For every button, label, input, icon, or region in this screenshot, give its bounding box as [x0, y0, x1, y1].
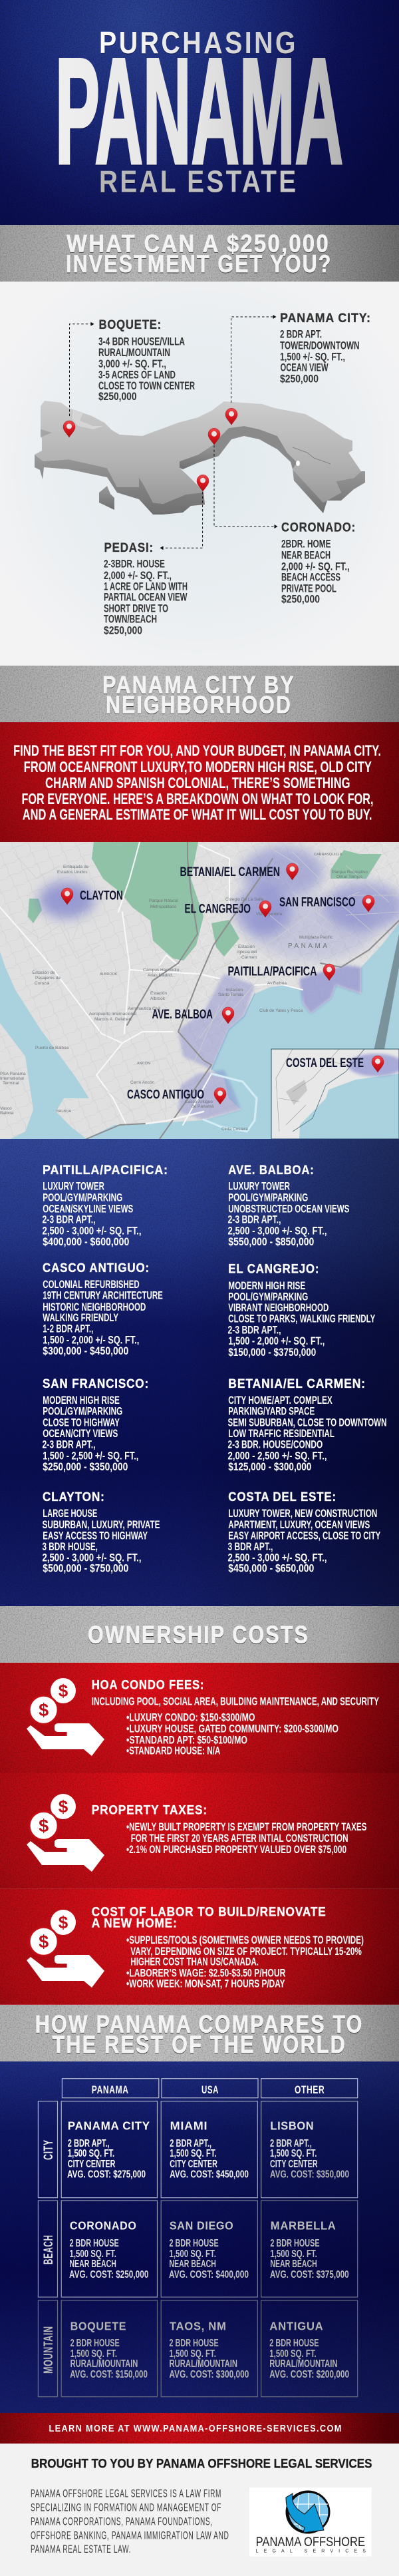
- row label: Beach: BEACH: [41, 2235, 56, 2264]
- place names: de Panamá: [192, 1104, 214, 1109]
- panel: neighborhood details: [0, 1139, 399, 1606]
- text block: Costa del Este: [227, 1490, 381, 1575]
- heading: SAN FRANCISCO:: [43, 1377, 149, 1391]
- section heading: what can a $250,000 investment get you: [0, 225, 399, 282]
- cell: San Diego: 1,500 SQ. FT.: [169, 2249, 216, 2260]
- details: COLONIAL REFURBISHED: [43, 1278, 140, 1291]
- section heading: what can a $250,000 investment get you: INVESTMENT GET YOU?: [66, 250, 332, 278]
- section heading: ownership costs: [0, 1606, 399, 1663]
- icon: hand with coins: $: [59, 1681, 68, 1701]
- column header: USA: [162, 2079, 258, 2098]
- place names: Arias Madrid...: [148, 973, 176, 978]
- icon: hand with coins: $: [59, 1912, 68, 1932]
- cell: Panama City: 1,500 SQ. FT.: [68, 2148, 114, 2159]
- details: Boquete: 3-4 BDR HOUSE/VILLA: [98, 335, 185, 347]
- label: Casco Antiguo: CASCO ANTIGUO: [127, 1088, 204, 1102]
- cell: Taos, NM: 1,500 SQ. FT.: [169, 2348, 216, 2360]
- details: POOL/GYM/PARKING: [43, 1191, 122, 1204]
- details: Coronado: $250,000: [281, 592, 320, 605]
- panel: about: [0, 2444, 399, 2576]
- details: $400,000 - $600,000: [43, 1235, 129, 1248]
- place names: Estación: [238, 945, 255, 949]
- icon: Panama City pin: [225, 408, 237, 425]
- section heading: what can a $250,000 investment get you: WHAT CAN A $250,000: [66, 229, 330, 257]
- text block: Casco Antiguo: [43, 1261, 163, 1357]
- place names: Estación: [226, 988, 243, 992]
- details: Boquete: RURAL/MOUNTAIN: [98, 346, 170, 359]
- place names: Estación de: [33, 970, 55, 975]
- panel: HOA condo fees: [0, 1663, 399, 1773]
- place names: PANAMA: [288, 943, 330, 950]
- details: LUXURY TOWER: [228, 1180, 290, 1193]
- details: LUXURY TOWER: [43, 1180, 104, 1193]
- place names: Carmen: [241, 955, 257, 960]
- details: OCEAN/SKYLINE VIEWS: [43, 1203, 133, 1215]
- details: 1,500 - 2,000 +/- SQ. FT.,: [228, 1335, 325, 1347]
- text block: HOA details: •LUXURY CONDO: $150-$300/MO: [126, 1711, 255, 1724]
- cell: Miami: AVG. COST: $450,000: [170, 2169, 249, 2181]
- place names: Iglesia del: [237, 950, 257, 955]
- heading: CLAYTON:: [43, 1490, 105, 1504]
- heading: property taxes: PROPERTY TAXES:: [92, 1803, 207, 1818]
- column header: Panama: [62, 2079, 159, 2098]
- text block: labor details: •LABORER’S WAGE: $2.50-$3.50 P/HOUR: [126, 1966, 285, 1979]
- place names: ALBROOK: [100, 972, 118, 976]
- arrow: Boquete: [69, 322, 94, 416]
- details: 2,000 - 2,500 +/- SQ. FT.,: [227, 1449, 327, 1462]
- details: LOW TRAFFIC RESIDENTIAL: [228, 1427, 334, 1440]
- details: 2-3 BDR APT.,: [227, 1213, 281, 1226]
- details: Panama City: [280, 328, 359, 385]
- details: [43, 1507, 160, 1575]
- place names: Aeropuerto Internacional: [89, 1012, 137, 1016]
- cell: Marbella: [261, 2201, 358, 2297]
- cell: Coronado: [61, 2201, 157, 2297]
- details: Coronado: 2BDR. HOME: [281, 537, 331, 550]
- place names: Multiplaza Pacific: [299, 935, 333, 940]
- row label: Beach: [38, 2201, 57, 2297]
- details: Panama City: TOWER/DOWNTOWN: [280, 339, 359, 351]
- place names: CARRASQUILLA: [314, 853, 342, 857]
- details: Boquete: $250,000: [98, 390, 137, 403]
- cell: Taos, NM: [161, 2300, 257, 2397]
- cell: Antigua: ANTIGUA: [269, 2320, 323, 2333]
- heading: COSTA DEL ESTE:: [228, 1490, 336, 1504]
- text block: Paitilla/Pacifica: [43, 1163, 168, 1248]
- call to action: learn more: [0, 2413, 399, 2444]
- cell: Panama City: 2 BDR APT.,: [68, 2138, 110, 2149]
- panel: cost of labor: [0, 1889, 399, 2005]
- details: CLOSE TO HIGHWAY: [43, 1416, 120, 1429]
- cell: Boquete: 1,500 SQ. FT.: [70, 2348, 117, 2360]
- section heading: Panama City by neighborhood: PANAMA CITY BY: [102, 671, 295, 699]
- details: LARGE HOUSE: [43, 1507, 97, 1520]
- place names: Parque Recreativo: [332, 870, 368, 875]
- cell: Marbella: MARBELLA: [271, 2219, 336, 2233]
- title: Purchasing: PURCHASING: [99, 25, 298, 60]
- cell: Coronado: CORONADO: [70, 2219, 137, 2233]
- text block: Betania/El Carmen: [227, 1377, 387, 1473]
- row label: City: CITY: [41, 2139, 56, 2160]
- label: Clayton: CLAYTON: [80, 889, 123, 903]
- place names: Corozal: [35, 981, 50, 986]
- details: 19TH CENTURY ARCHITECTURE: [43, 1289, 163, 1302]
- roads: [0, 842, 399, 1139]
- cell: Antigua: RURAL/MOUNTAIN: [269, 2358, 338, 2370]
- place names: BALBOA: [57, 1110, 71, 1114]
- details: Coronado: [281, 537, 350, 605]
- details: Pedasi: 2,000 +/- SQ. FT.,: [104, 569, 172, 582]
- logo wordmark: PANAMA OFFSHORE: [256, 2535, 365, 2549]
- icon: hand with coins: [27, 1678, 104, 1756]
- text block: labor details: HIGHER COST THAN US/CANADA.: [130, 1956, 259, 1968]
- details: 2-3 BDR APT.,: [227, 1323, 281, 1336]
- text block: intro: [13, 742, 381, 823]
- text block: Coronado: [281, 521, 356, 605]
- cell: Lisbon: AVG. COST: $350,000: [270, 2169, 349, 2181]
- call to action: learn more: LEARN MORE AT WWW.PANAMA-OFFSHORE-SERVICES.COM: [49, 2424, 342, 2434]
- icon: hand with coins: [27, 1910, 104, 1988]
- logo: Panama Offshore Legal Services: [249, 2487, 372, 2557]
- details: HISTORIC NEIGHBORHOOD: [43, 1301, 146, 1313]
- city street grid: [186, 842, 399, 1070]
- arrow: Panama City: [231, 315, 277, 403]
- cell: Lisbon: CITY CENTER: [270, 2159, 318, 2170]
- icon: Boquete pin: [63, 421, 75, 437]
- place names: Vasco: [0, 1106, 12, 1111]
- label: El Cangrejo: EL CANGREJO: [185, 903, 251, 917]
- details: Pedasi: SHORT DRIVE TO: [104, 602, 168, 614]
- text block: San Francisco: [43, 1377, 149, 1473]
- place names: Club de Yates y Pesca: [259, 1008, 303, 1013]
- text block: about the firm: PANAMA CORPORATIONS, PANAMA FOUNDATIONS,: [31, 2515, 213, 2528]
- details: EASY ACCESS TO HIGHWAY: [43, 1529, 148, 1542]
- details: PARKING/YARD SPACE: [228, 1405, 315, 1418]
- cell: Boquete: BOQUETE: [70, 2320, 126, 2333]
- details: [227, 1507, 381, 1575]
- column header: Other: OTHER: [295, 2083, 325, 2096]
- details: $550,000 - $850,000: [228, 1235, 314, 1248]
- panel: comparison table: [0, 2061, 399, 2413]
- details: 2,500 - 3,000 +/- SQ. FT.,: [227, 1224, 327, 1237]
- details: Panama City: 2 BDR APT.: [280, 328, 322, 341]
- panel: property taxes: [0, 1773, 399, 1889]
- icon: hand with coins: [27, 1794, 104, 1872]
- details: [43, 1394, 138, 1473]
- row label: City: [38, 2101, 57, 2198]
- place names: Av.Balboa: [267, 981, 287, 986]
- details: 3 BDR HOUSE,: [43, 1540, 98, 1553]
- cell: Lisbon: 2 BDR APT.,: [270, 2138, 312, 2149]
- cell: Marbella: AVG. COST: $375,000: [270, 2269, 349, 2280]
- cell: Miami: CITY CENTER: [170, 2159, 217, 2170]
- details: Boquete: 3-5 ACRES OF LAND: [98, 368, 176, 381]
- cell: Panama City: PANAMA CITY: [68, 2119, 150, 2132]
- details: Panama City: 1,500 +/- SQ. FT.,: [280, 350, 345, 363]
- text block: HOA details: •STANDARD APT: $50-$100/MO: [126, 1734, 247, 1747]
- details: $500,000 - $750,000: [43, 1562, 128, 1575]
- details: [227, 1279, 376, 1359]
- details: $150,000 - $3750,000: [228, 1346, 316, 1359]
- cell: San Diego: SAN DIEGO: [170, 2219, 233, 2233]
- cell: Marbella: 1,500 SQ. FT.: [270, 2249, 317, 2260]
- details: $250,000 - $350,000: [43, 1460, 128, 1473]
- map of Panama: [35, 401, 365, 515]
- place names: Omar Torrijos: [336, 875, 363, 879]
- place names: Campus Harmodio: [143, 968, 180, 972]
- details: Pedasi: 1 ACRE OF LAND WITH: [104, 580, 188, 593]
- section heading: Panama City by neighborhood: NEIGHBORHOOD: [106, 691, 292, 719]
- icon: hand with coins: $: [39, 1700, 49, 1720]
- details: $450,000 - $650,000: [228, 1562, 314, 1575]
- text block: HOA details: •STANDARD HOUSE: N/A: [126, 1745, 220, 1757]
- place names: Santo Tomás: [218, 992, 244, 997]
- panel: $250,000 investment map: [0, 282, 399, 666]
- details: Pedasi: TOWN/BEACH: [104, 612, 157, 625]
- details: 2,500 - 3,000 +/- SQ. FT.,: [227, 1552, 327, 1564]
- place names: ANCÓN: [137, 1061, 150, 1066]
- heading: CASCO ANTIGUO:: [43, 1261, 150, 1275]
- icon: hand with coins: $: [59, 1797, 68, 1817]
- details: Pedasi: 2-3BDR. HOUSE: [104, 558, 165, 570]
- text block: about the firm: OFFSHORE BANKING, PANAMA IMMIGRATION LAW AND: [31, 2529, 229, 2542]
- details: SUBURBAN, LUXURY, PRIVATE: [43, 1518, 160, 1531]
- details: [227, 1394, 387, 1473]
- details: 1-2 BDR APT.,: [43, 1323, 93, 1335]
- arrow: Coronado: [214, 445, 278, 529]
- details: POOL/GYM/PARKING: [228, 1291, 308, 1303]
- cell: Coronado: 2 BDR HOUSE: [69, 2238, 119, 2249]
- cell: Panama City: AVG. COST: $275,000: [67, 2169, 146, 2181]
- heading: Boquete: BOQUETE:: [98, 318, 162, 332]
- cell: Antigua: 1,500 SQ. FT.: [269, 2348, 317, 2360]
- details: $300,000 - $450,000: [43, 1345, 128, 1357]
- details: Panama City: OCEAN VIEW: [281, 361, 329, 374]
- text block: labor details: [126, 1934, 364, 1990]
- cell: Panama City: [61, 2101, 157, 2198]
- cell: Coronado: AVG. COST: $250,000: [69, 2269, 148, 2280]
- details: POOL/GYM/PARKING: [43, 1405, 122, 1418]
- label: Betania/El Carmen: BETANIA/EL CARMEN: [180, 865, 280, 879]
- details: 2,500 - 3,000 +/- SQ. FT.,: [43, 1552, 141, 1564]
- details: [43, 1180, 141, 1248]
- place names: Pasajeros de: [35, 976, 61, 980]
- place names: Estación: [150, 991, 167, 996]
- label: Ave. Balboa: AVE. BALBOA: [152, 1008, 213, 1022]
- place names: Estados Unidos: [57, 870, 88, 875]
- heading: cost of labor: [92, 1904, 327, 1931]
- icon: Pedasi pin: [197, 475, 209, 491]
- details: Boquete: 3,000 +/- SQ. FT.,: [98, 357, 166, 370]
- label: Clayton: [61, 888, 123, 905]
- row label: Mountain: MOUNTAIN: [41, 2326, 56, 2374]
- details: Pedasi: $250,000: [104, 624, 142, 636]
- details: Pedasi: [104, 558, 188, 636]
- title: Real Estate: REAL ESTATE: [99, 164, 298, 198]
- details: 2-3 BDR. HOUSE/CONDO: [227, 1438, 323, 1451]
- cell: Taos, NM: TAOS, NM: [170, 2320, 227, 2333]
- details: $125,000 - $300,000: [228, 1460, 311, 1473]
- place names: Cerro Ancón: [130, 1080, 155, 1085]
- icon: Coronado pin: [208, 428, 220, 445]
- text block: tax details: [126, 1821, 367, 1856]
- water: [0, 923, 399, 1139]
- cell: Lisbon: [261, 2101, 358, 2198]
- text block: Ave. Balboa: [227, 1163, 349, 1248]
- place names: International: [0, 1076, 24, 1081]
- details: POOL/GYM/PARKING: [228, 1191, 308, 1204]
- place names: [0, 853, 368, 1132]
- details: Boquete: [98, 335, 195, 403]
- cell: Antigua: AVG. COST: $200,000: [269, 2369, 349, 2380]
- place names: Casco Antiguo: [185, 1100, 213, 1104]
- details: 2,500 - 3,000 +/- SQ. FT.,: [43, 1224, 141, 1237]
- label: San Francisco: SAN FRANCISCO: [279, 896, 356, 910]
- cell: Miami: [161, 2101, 257, 2198]
- cell: San Diego: NEAR BEACH: [169, 2258, 216, 2270]
- place names: Marcos A. Gelabert: [94, 1017, 132, 1022]
- cell: Antigua: 2 BDR HOUSE: [269, 2338, 319, 2349]
- text block: labor details: •WORK WEEK: MON-SAT, 7 HOURS P/DAY: [126, 1978, 285, 1990]
- place names: Metropolitano: [150, 905, 177, 909]
- cell: Miami: 2 BDR APT.,: [170, 2138, 211, 2149]
- details: Coronado: 2,000 +/- SQ. FT.,: [281, 560, 350, 573]
- place names: Vía Argentina: [256, 912, 282, 917]
- details: 2-3 BDR APT.,: [43, 1438, 96, 1451]
- place names: PSA Panama: [0, 1072, 26, 1076]
- details: Coronado: BEACH ACCESS: [281, 571, 340, 584]
- section heading: ownership costs: OWNERSHIP COSTS: [88, 1621, 309, 1649]
- heading: EL CANGREJO:: [228, 1262, 319, 1277]
- place names: Balboa: [0, 1111, 14, 1116]
- text block: Panama City: [280, 311, 371, 385]
- cell: Boquete: RURAL/MOUNTAIN: [70, 2358, 138, 2370]
- arrow: Pedasi: [160, 492, 203, 550]
- row label: Mountain: [38, 2300, 57, 2397]
- icon: hand with coins: $: [39, 1932, 49, 1952]
- header: title panel: [0, 0, 399, 225]
- place names: Cinta Costera: [221, 1127, 248, 1132]
- text block: about the firm: PANAMA REAL ESTATE LAW.: [31, 2543, 131, 2555]
- details: VIBRANT NEIGHBORHOOD: [228, 1301, 329, 1314]
- column header: USA: USA: [201, 2083, 219, 2096]
- cell: Coronado: 1,500 SQ. FT.: [69, 2249, 116, 2260]
- column header: Other: [261, 2079, 358, 2098]
- cell: Marbella: NEAR BEACH: [270, 2258, 317, 2270]
- details: CITY HOME/APT. COMPLEX: [228, 1394, 332, 1406]
- details: 1,500 - 2,500 +/- SQ. FT.,: [43, 1449, 138, 1462]
- place names: Terminal: [3, 1081, 19, 1086]
- heading: Pedasi: PEDASI:: [104, 540, 154, 555]
- heading: PAITILLA/PACIFICA:: [43, 1163, 168, 1178]
- heading: Coronado: CORONADO:: [281, 521, 356, 535]
- cell: San Diego: AVG. COST: $400,000: [169, 2269, 249, 2280]
- logo tagline: LEGAL SERVICES: [256, 2549, 366, 2553]
- cell: Antigua: [261, 2300, 358, 2397]
- place names: Aeronautica Civil: [128, 1006, 161, 1011]
- text block: El Cangrejo: [227, 1262, 376, 1359]
- details: OCEAN/CITY VIEWS: [43, 1427, 118, 1440]
- neighborhood highlights: [39, 847, 399, 1120]
- details: 3 BDR APT.,: [227, 1540, 273, 1553]
- cell: Lisbon: LISBON: [270, 2119, 314, 2132]
- heading: AVE. BALBOA:: [228, 1163, 315, 1178]
- heading: cost of labor: A NEW HOME:: [92, 1916, 178, 1931]
- heading: Panama City: PANAMA CITY:: [280, 311, 371, 325]
- cell: San Diego: [161, 2201, 257, 2297]
- map: Panama City neighborhoods: [0, 842, 399, 1139]
- text block: Pedasi: [104, 540, 188, 636]
- cell: Marbella: 2 BDR HOUSE: [270, 2238, 320, 2249]
- text block: Boquete: [98, 318, 195, 403]
- section heading: Panama City by neighborhood: [0, 666, 399, 722]
- details: WALKING FRIENDLY: [43, 1311, 118, 1324]
- details: MODERN HIGH RISE: [228, 1279, 305, 1292]
- icon: globe with arrow: [286, 2491, 330, 2533]
- details: [227, 1180, 349, 1248]
- details: [43, 1278, 163, 1357]
- details: Coronado: NEAR BEACH: [281, 548, 331, 561]
- text block: about the firm: [31, 2487, 229, 2555]
- text block: about the firm: SPECIALIZING IN FORMATION AND MANAGEMENT OF: [31, 2501, 221, 2514]
- cell: Boquete: [61, 2300, 157, 2397]
- cell: Miami: MIAMI: [170, 2119, 207, 2132]
- place names: Albrook: [150, 996, 166, 1001]
- label: Costa del Este: COSTA DEL ESTE: [286, 1056, 364, 1070]
- column header: Panama: PANAMA: [92, 2083, 129, 2096]
- parks: [28, 842, 382, 961]
- inset: Costa del Este: [271, 934, 399, 1139]
- cell: Lisbon: 1,500 SQ. FT.: [270, 2148, 317, 2159]
- heading: BETANIA/EL CARMEN:: [228, 1377, 366, 1391]
- heading: cost of labor: COST OF LABOR TO BUILD/RENOVATE: [92, 1904, 327, 1919]
- heading: HOA condo fees: HOA CONDO FEES:: [92, 1678, 204, 1693]
- cell: Boquete: 2 BDR HOUSE: [70, 2338, 120, 2349]
- label: Paitilla/Pacifica: PAITILLA/PACIFICA: [227, 965, 317, 979]
- panel: neighborhood intro: [0, 722, 399, 842]
- details: Pedasi: PARTIAL OCEAN VIEW: [104, 591, 188, 604]
- cell: Coronado: NEAR BEACH: [69, 2258, 116, 2270]
- cell: Miami: 1,500 SQ. FT.: [170, 2148, 217, 2159]
- cell: Taos, NM: RURAL/MOUNTAIN: [169, 2358, 237, 2370]
- cell: Taos, NM: 2 BDR HOUSE: [169, 2338, 219, 2349]
- place names: Colegio De La Salle: [225, 897, 264, 902]
- details: Boquete: CLOSE TO TOWN CENTER: [98, 379, 195, 392]
- cell: Boquete: AVG. COST: $150,000: [70, 2369, 148, 2380]
- cell: San Diego: 2 BDR HOUSE: [169, 2238, 219, 2249]
- details: MODERN HIGH RISE: [43, 1394, 120, 1406]
- icon: hand with coins: $: [39, 1816, 49, 1836]
- details: Coronado: PRIVATE POOL: [281, 582, 336, 594]
- place names: Puerto de Balboa: [35, 1046, 69, 1050]
- cell: Taos, NM: AVG. COST: $300,000: [169, 2369, 249, 2380]
- details: Panama City: $250,000: [280, 372, 319, 385]
- place names: Embajada de: [63, 865, 89, 869]
- section heading: how Panama compares: [0, 2005, 399, 2061]
- text block: about the firm: PANAMA OFFSHORE LEGAL SERVICES IS A LAW FIRM: [31, 2487, 221, 2500]
- details: 2-3 BDR APT.,: [43, 1213, 96, 1226]
- details: 1,500 - 2,000 +/- SQ. FT.,: [43, 1333, 139, 1346]
- text block: HOA details: [92, 1695, 379, 1757]
- cell: Panama City: CITY CENTER: [68, 2159, 115, 2170]
- place names: Parque Natural: [149, 899, 178, 903]
- text block: Clayton: [43, 1490, 160, 1575]
